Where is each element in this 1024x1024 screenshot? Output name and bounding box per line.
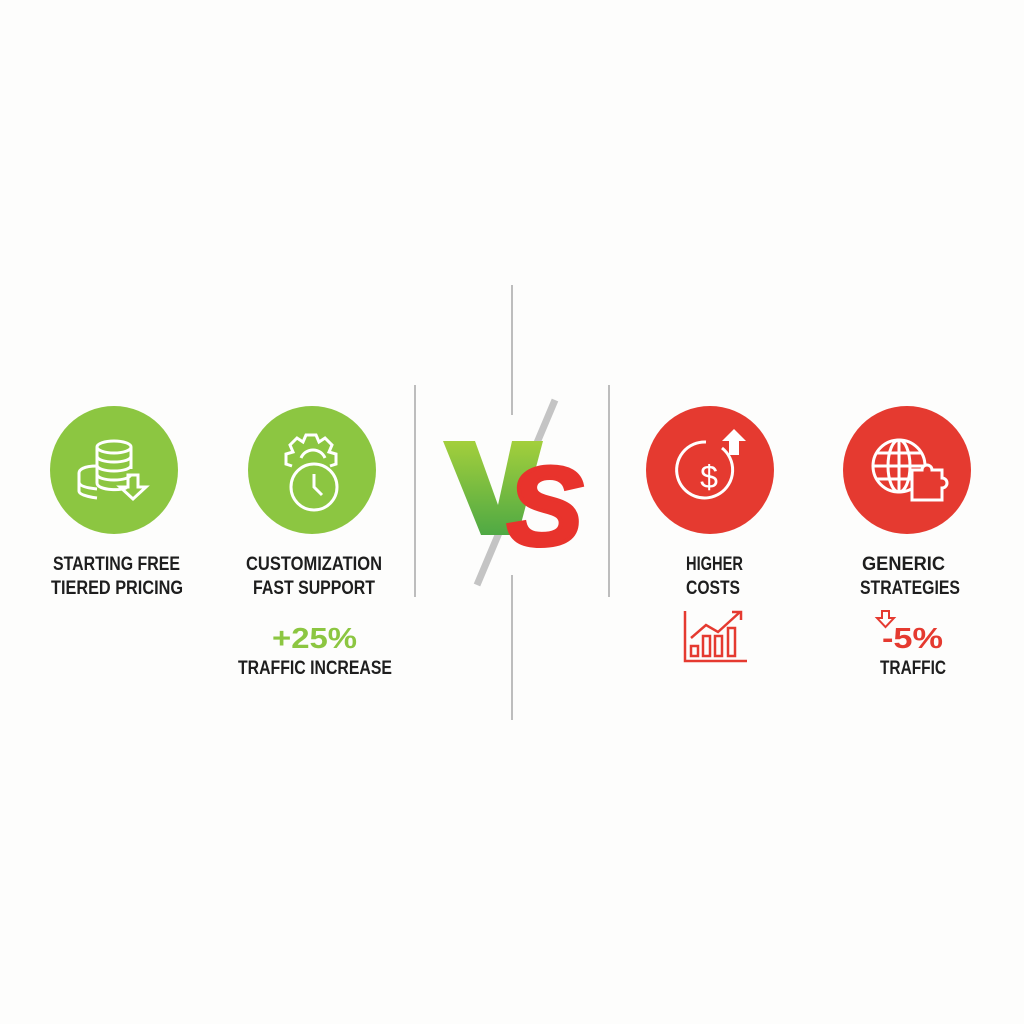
labels left: CUSTOMIZATION xyxy=(246,554,382,575)
labels right: STRATEGIES xyxy=(860,578,960,599)
icon: globe with puzzle xyxy=(843,406,971,534)
labels left: TRAFFIC INCREASE xyxy=(238,658,392,679)
icon: dollar up xyxy=(646,406,774,534)
labels left: FAST SUPPORT xyxy=(253,578,375,599)
stat: -5%: -5% xyxy=(882,623,943,655)
icon: dollar up: $ xyxy=(700,459,718,495)
labels right: GENERIC xyxy=(862,554,945,575)
VS logo xyxy=(443,400,583,585)
labels left: TIERED PRICING xyxy=(51,578,183,599)
labels right: COSTS xyxy=(686,578,740,599)
labels right: HIGHER xyxy=(686,554,743,575)
labels right xyxy=(686,554,960,679)
VS logo: S xyxy=(507,444,583,569)
icon: small down arrow xyxy=(877,611,894,627)
labels left xyxy=(51,554,392,679)
icon: gear with clock xyxy=(248,406,376,534)
icon: coins with down arrow xyxy=(50,406,178,534)
divider lines xyxy=(415,285,609,720)
icon: bar chart rising xyxy=(685,611,747,661)
labels left: STARTING FREE xyxy=(53,554,180,575)
stat: +25%: +25% xyxy=(272,623,357,655)
labels right: TRAFFIC xyxy=(880,658,946,679)
